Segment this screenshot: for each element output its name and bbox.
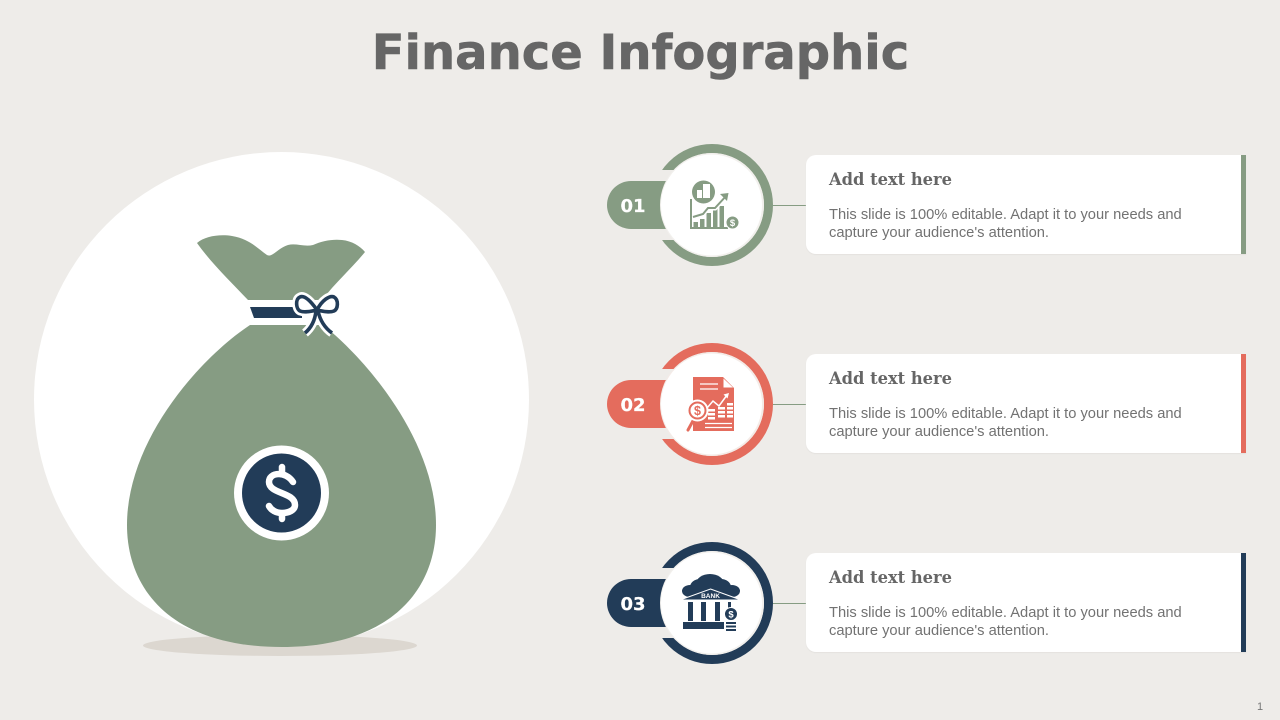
- item 01 card: capture your audience's attention.: [829, 224, 1049, 240]
- item 02 card: Add text here: [829, 369, 952, 388]
- item 02 badge: $: [694, 404, 701, 418]
- item 02 card: [806, 354, 1246, 453]
- title: Finance Infographic: [372, 25, 909, 81]
- page number: 1: [1257, 701, 1263, 713]
- item 03 card: capture your audience's attention.: [829, 622, 1049, 638]
- item 02 card: capture your audience's attention.: [829, 424, 1049, 440]
- item 02 card: This slide is 100% editable. Adapt it to your needs and: [829, 406, 1182, 422]
- item 03 badge: $: [728, 610, 734, 620]
- item 01 card: [806, 155, 1246, 254]
- item 02 badge: 02: [620, 395, 646, 416]
- item 01 badge: $: [730, 218, 736, 229]
- item 01 card: This slide is 100% editable. Adapt it to your needs and: [829, 206, 1182, 222]
- item 03 card: This slide is 100% editable. Adapt it to your needs and: [829, 604, 1182, 620]
- item 01 badge: 01: [620, 196, 646, 217]
- item 03 badge: 03: [620, 594, 646, 615]
- item 03 card: Add text here: [829, 568, 952, 587]
- item 03 badge: BANK: [701, 593, 720, 600]
- item 01 card: Add text here: [829, 170, 952, 189]
- item 03 card: [806, 553, 1246, 652]
